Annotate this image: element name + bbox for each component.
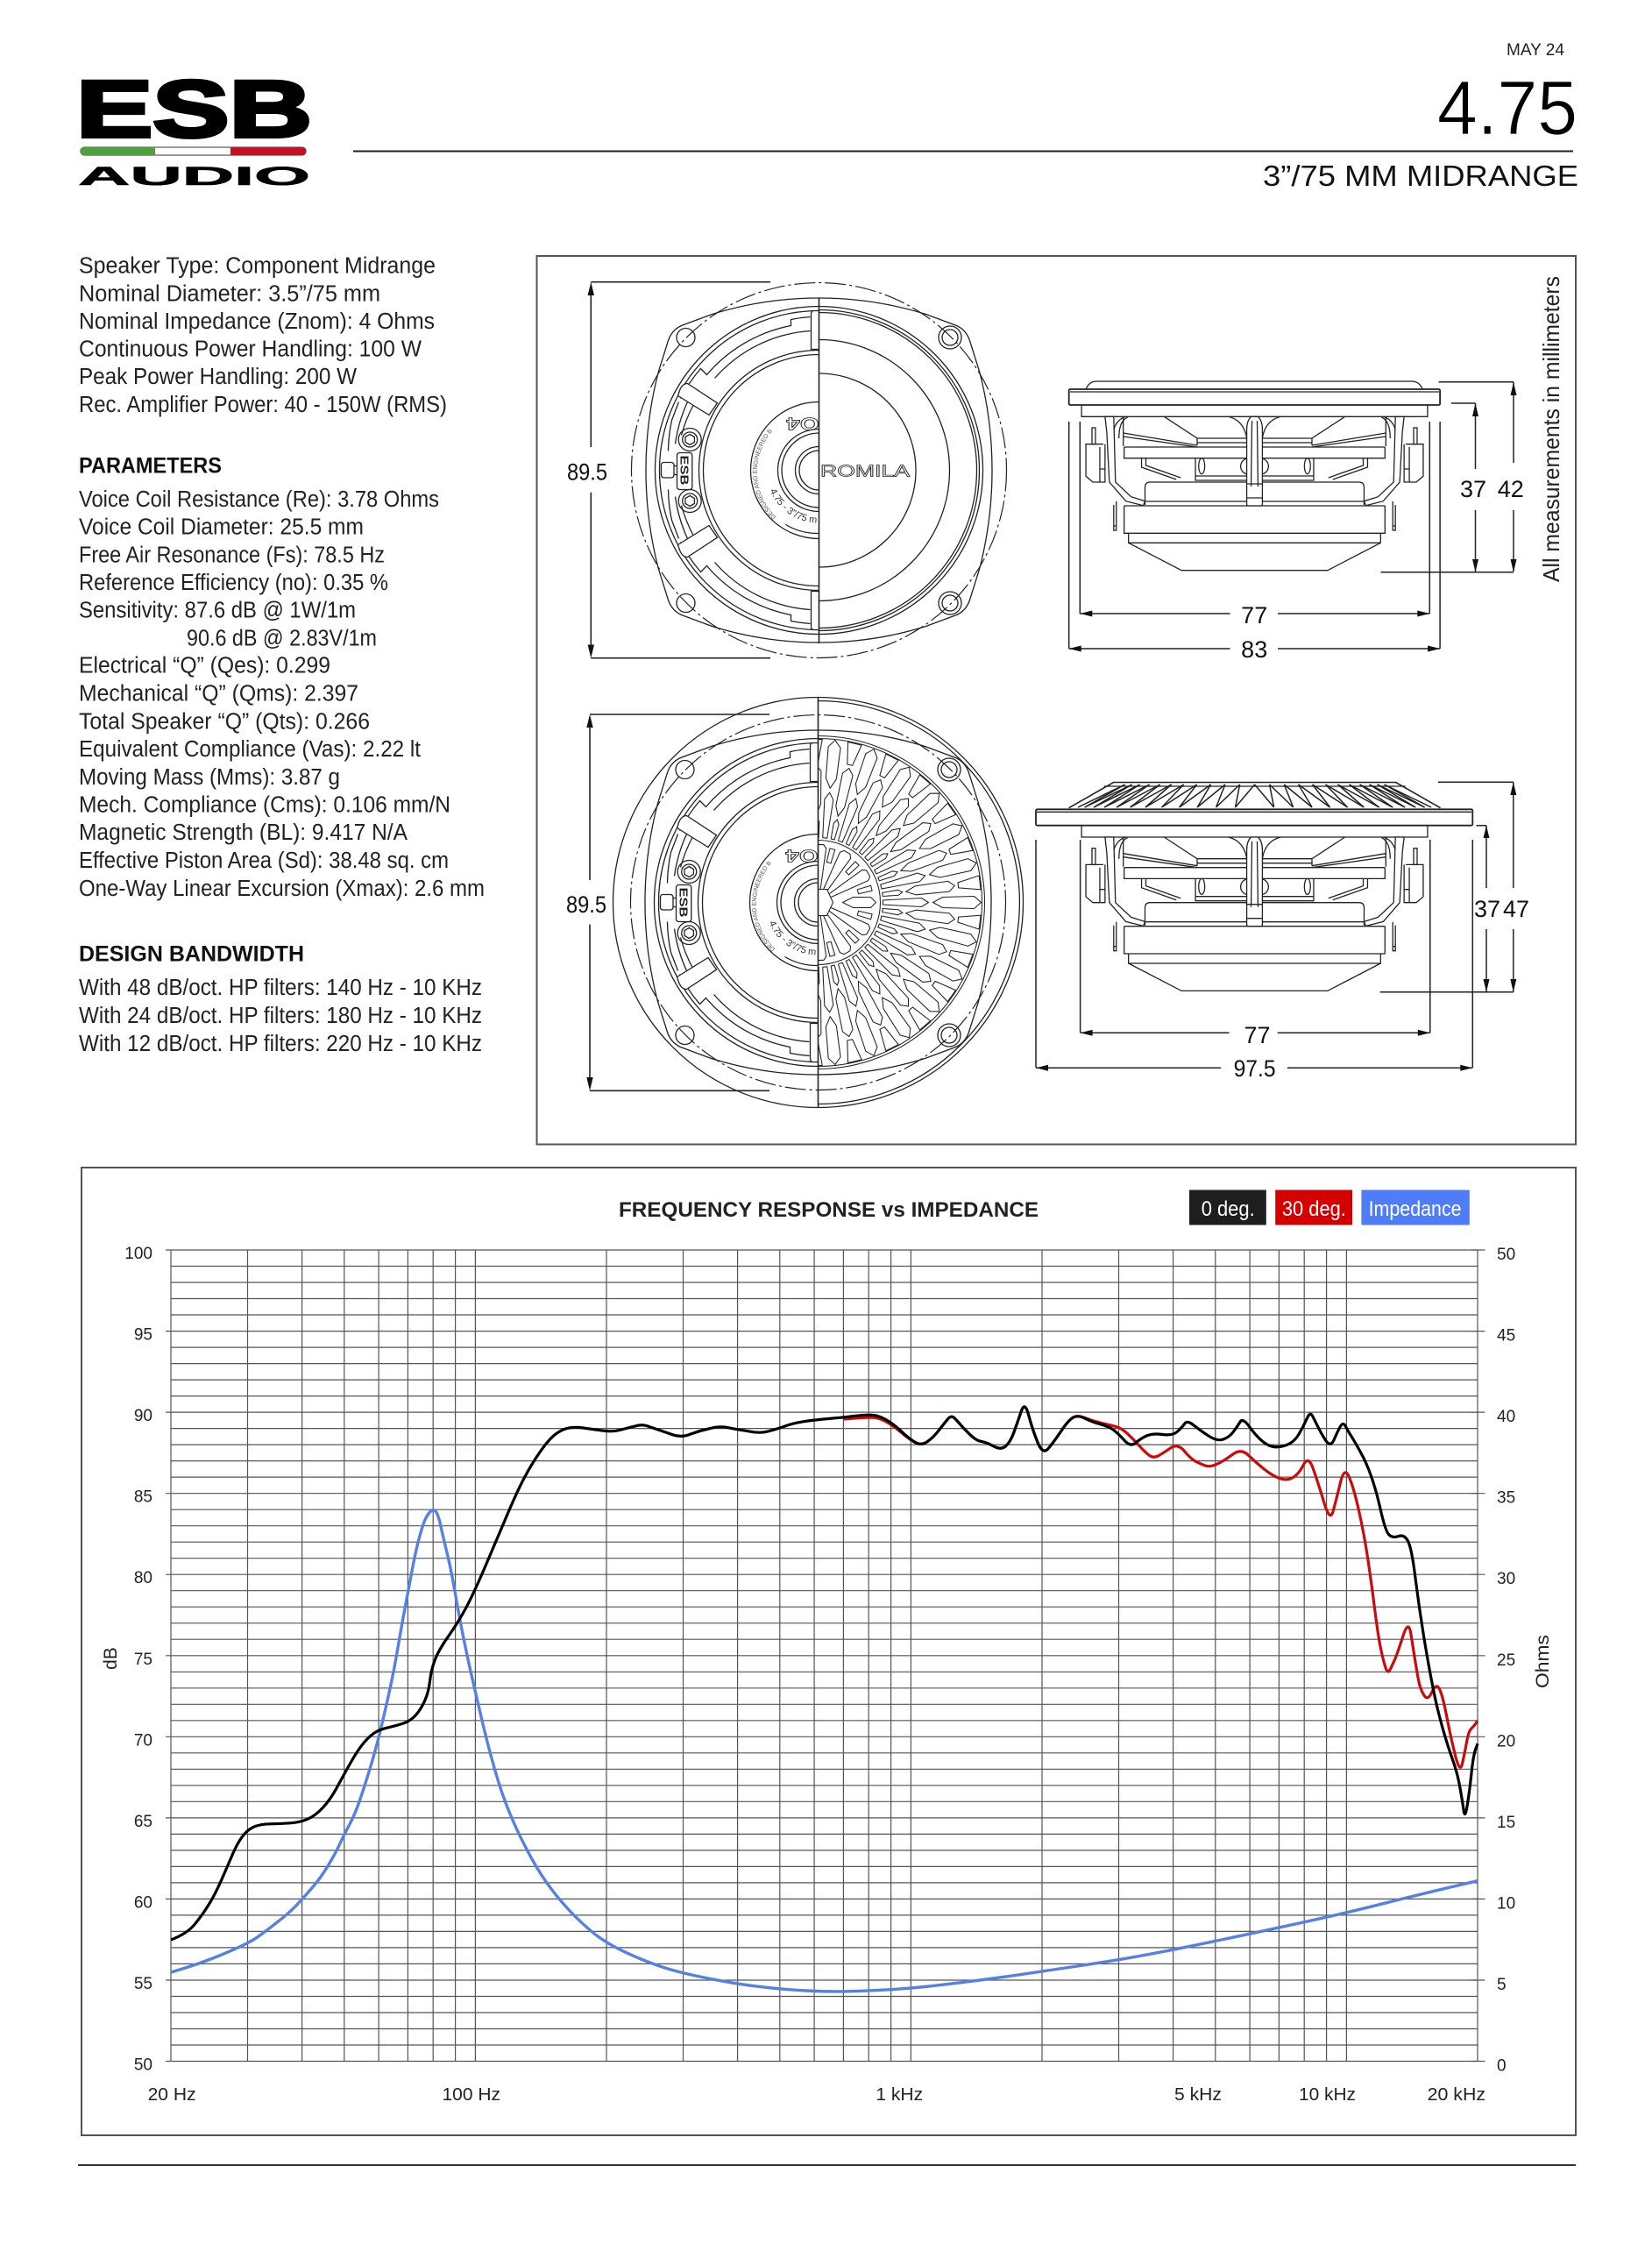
right axis labels: Ohms: 5 (1497, 1976, 1507, 1994)
right axis labels: Ohms: 45 (1497, 1327, 1515, 1346)
parameters list: Free Air Resonance (Fs): 78.5 Hz (79, 543, 385, 568)
right axis labels: Ohms: 35 (1497, 1489, 1515, 1508)
right axis labels: Ohms: 15 (1497, 1814, 1515, 1832)
front view: speaker without grille: ROMILA (820, 462, 910, 479)
x axis labels: 20 kHz (1428, 2085, 1485, 2105)
front view: speaker without grille: 4.75 - 3”/75 mm C (771, 489, 817, 522)
logo: ESB Audio (76, 65, 312, 191)
left axis labels: dB: 65 (134, 1813, 152, 1831)
panel: dimensions drawings (536, 255, 1577, 1145)
header rule (353, 151, 1573, 153)
x axis labels (148, 2085, 1485, 2105)
30 degree response curve (843, 1407, 1478, 1767)
parameters heading: PARAMETERS (79, 453, 222, 478)
parameters list: Voice Coil Resistance (Re): 3.78 Ohms (79, 487, 439, 512)
right axis title: Ohms (1533, 1635, 1553, 1688)
general specs text: Continuous Power Handling: 100 W (79, 337, 422, 361)
parameters list: One-Way Linear Excursion (Xmax): 2.6 mm (79, 877, 485, 901)
parameters list: Mech. Compliance (Cms): 0.106 mm/N (79, 792, 450, 817)
dimension: 89.5 lower (566, 714, 769, 1090)
parameters list: Total Speaker “Q” (Qts): 0.266 (79, 709, 370, 734)
parameters list: Magnetic Strength (BL): 9.417 N/A (79, 820, 408, 845)
legend: 30 deg. (1282, 1197, 1346, 1221)
right axis labels: Ohms: 50 (1497, 1246, 1515, 1264)
front view: speaker with grille: DESIGNED AND ENGINEERED BY ESB - ITALY (752, 861, 775, 952)
parameters list: Voice Coil Diameter: 25.5 mm (79, 515, 364, 540)
dimensions: side view upper: 83 (1241, 636, 1267, 663)
dimensions: side view lower: 97.5 (1234, 1055, 1276, 1082)
right axis labels: Ohms: 10 (1497, 1894, 1515, 1913)
dimensions: side view lower (1036, 782, 1529, 1082)
x axis labels: 5 kHz (1174, 2085, 1222, 2105)
legend: 0 deg. (1202, 1197, 1255, 1221)
general specs text: Nominal Impedance (Znom): 4 Ohms (79, 309, 435, 334)
design bandwidth list: With 12 dB/oct. HP filters: 220 Hz - 10 KHz (79, 1032, 482, 1056)
parameters list: Sensitivity: 87.6 dB @ 1W/1m (79, 599, 356, 623)
impedance curve (171, 1510, 1478, 1992)
front view: speaker with grille (612, 696, 1024, 1108)
legend: Impedance (1369, 1197, 1462, 1221)
side view: speaker without grille (1069, 381, 1440, 571)
general specs text: Rec. Amplifier Power: 40 - 150W (RMS) (79, 393, 447, 417)
left axis labels: dB: 75 (134, 1651, 152, 1669)
left axis labels: dB: 90 (134, 1407, 152, 1425)
design bandwidth list (79, 976, 482, 1056)
parameters list: Mechanical “Q” (Qms): 2.397 (79, 682, 358, 707)
logo: ESB Audio: AUDIO (78, 162, 310, 191)
x axis labels: 1 kHz (876, 2085, 923, 2105)
x axis labels: 10 kHz (1299, 2085, 1356, 2105)
general specs text (79, 254, 447, 417)
front view: speaker without grille: ESB (678, 456, 691, 486)
design bandwidth heading: DESIGN BANDWIDTH (79, 941, 304, 966)
right axis labels: Ohms: 40 (1497, 1408, 1515, 1426)
right axis labels: Ohms: 30 (1497, 1570, 1515, 1588)
left axis labels: dB: 50 (134, 2056, 152, 2074)
chart title: FREQUENCY RESPONSE vs IMPEDANCE (619, 1198, 1039, 1222)
left axis labels: dB (124, 1245, 152, 2074)
legend (1189, 1190, 1470, 1225)
parameters list: Effective Piston Area (Sd): 38.48 sq. cm (79, 849, 449, 873)
parameters list: Moving Mass (Mms): 3.87 g (79, 765, 340, 790)
left axis labels: dB: 80 (134, 1569, 152, 1587)
subtitle: 3”/75 MM MIDRANGE (1263, 160, 1578, 192)
dimensions: side view upper: 37 (1460, 476, 1486, 502)
dimensions: side view upper (1069, 382, 1524, 663)
dimensions: side view upper: 77 (1241, 602, 1267, 628)
logo: ESB Audio: ESB (76, 65, 312, 154)
panel: frequency response chart (82, 1168, 1576, 2135)
left axis labels: dB: 100 (124, 1245, 152, 1263)
general specs text: Peak Power Handling: 200 W (79, 365, 357, 389)
front view: speaker with grille: ESB (677, 887, 691, 917)
parameters list (79, 487, 485, 901)
right axis labels: Ohms: 25 (1497, 1651, 1515, 1670)
front view: speaker without grille (631, 282, 1008, 659)
dimensions: side view lower: 47 (1503, 896, 1529, 922)
dimensions: side view upper: 42 (1498, 476, 1524, 502)
right axis labels: Ohms (1497, 1246, 1515, 2076)
model number: 4.75 (1437, 66, 1578, 151)
right axis labels: Ohms: 20 (1497, 1732, 1515, 1750)
parameters list: Equivalent Compliance (Vas): 2.22 lt (79, 737, 421, 762)
right axis labels: Ohms: 0 (1497, 2056, 1507, 2076)
parameters list: Electrical “Q” (Qes): 0.299 (79, 654, 330, 678)
side view: speaker with grille (1036, 782, 1472, 991)
general specs text: Speaker Type: Component Midrange (79, 254, 436, 279)
left axis labels: dB: 85 (134, 1488, 152, 1507)
parameters list: Reference Efficiency (no): 0.35 % (79, 571, 388, 595)
grid (166, 1250, 1485, 2062)
x axis labels: 100 Hz (442, 2085, 500, 2105)
dimension: 89.5 upper (567, 282, 770, 658)
front view: speaker with grille: 4.75 - 3”/75 mm C (770, 922, 816, 955)
left axis labels: dB: 70 (134, 1731, 152, 1750)
0 degree response curve (171, 1407, 1478, 1940)
date: MAY 24 (1507, 41, 1564, 60)
footer rule (78, 2164, 1576, 2166)
general specs text: Nominal Diameter: 3.5”/75 mm (79, 281, 380, 306)
dimension: 89.5 lower: 89.5 (566, 891, 606, 918)
x axis labels: 20 Hz (148, 2085, 196, 2105)
front view: speaker without grille: DESIGNED AND ENGINEERED BY ESB - ITALY (752, 430, 776, 519)
left axis labels: dB: 95 (134, 1326, 152, 1345)
front view: speaker with grille: O4 (784, 845, 819, 864)
design bandwidth list: With 24 dB/oct. HP filters: 180 Hz - 10 KHz (79, 1004, 482, 1028)
left axis labels: dB: 55 (134, 1975, 152, 1993)
dimension: 89.5 upper: 89.5 (567, 459, 607, 486)
left axis title: dB (101, 1647, 121, 1670)
note: units: All measurements in millimeters (1538, 276, 1564, 582)
front view: speaker without grille: O4 (785, 414, 819, 433)
parameters list: 90.6 dB @ 2.83V/1m (187, 626, 377, 650)
left axis labels: dB: 60 (134, 1893, 152, 1912)
dimensions: side view lower: 37 (1474, 896, 1500, 922)
design bandwidth list: With 48 dB/oct. HP filters: 140 Hz - 10 KHz (79, 976, 482, 1000)
dimensions: side view lower: 77 (1244, 1022, 1271, 1048)
